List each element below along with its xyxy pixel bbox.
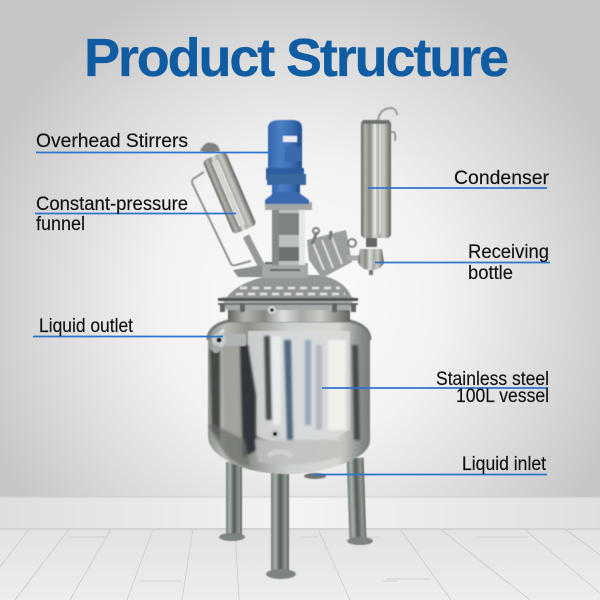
label: liquid outlet: Liquid outlet [39, 316, 134, 337]
label: constant-pressure funnel: Constant-pressure [36, 194, 188, 215]
label: liquid inlet: Liquid inlet [462, 454, 547, 475]
receiving bottle [358, 238, 384, 275]
legs [219, 456, 373, 579]
dome lid [226, 263, 352, 298]
label: condenser: Condenser [454, 168, 550, 189]
constant-pressure funnel [192, 143, 261, 265]
liquid outlet fitting [212, 333, 246, 353]
neck and flange [218, 297, 358, 322]
label: receiving bottle: Receiving [468, 242, 549, 263]
shaft housing [265, 202, 312, 265]
label: receiving bottle [375, 242, 550, 284]
condenser [361, 108, 397, 238]
vessel body [208, 321, 370, 479]
flanged port [307, 228, 360, 278]
label: stainless steel vessel: 100L vessel [456, 386, 549, 407]
label: constant-pressure funnel [35, 194, 236, 235]
label: stainless steel vessel: Stainless steel [436, 369, 549, 390]
label: constant-pressure funnel: funnel [36, 214, 85, 235]
title: Product Structure [84, 28, 509, 88]
reactor machine [192, 108, 397, 579]
label: overhead stirrers: Overhead Stirrers [36, 131, 188, 152]
label: stainless steel vessel [322, 369, 549, 407]
blue motor [265, 120, 309, 204]
label: receiving bottle: bottle [468, 263, 513, 284]
